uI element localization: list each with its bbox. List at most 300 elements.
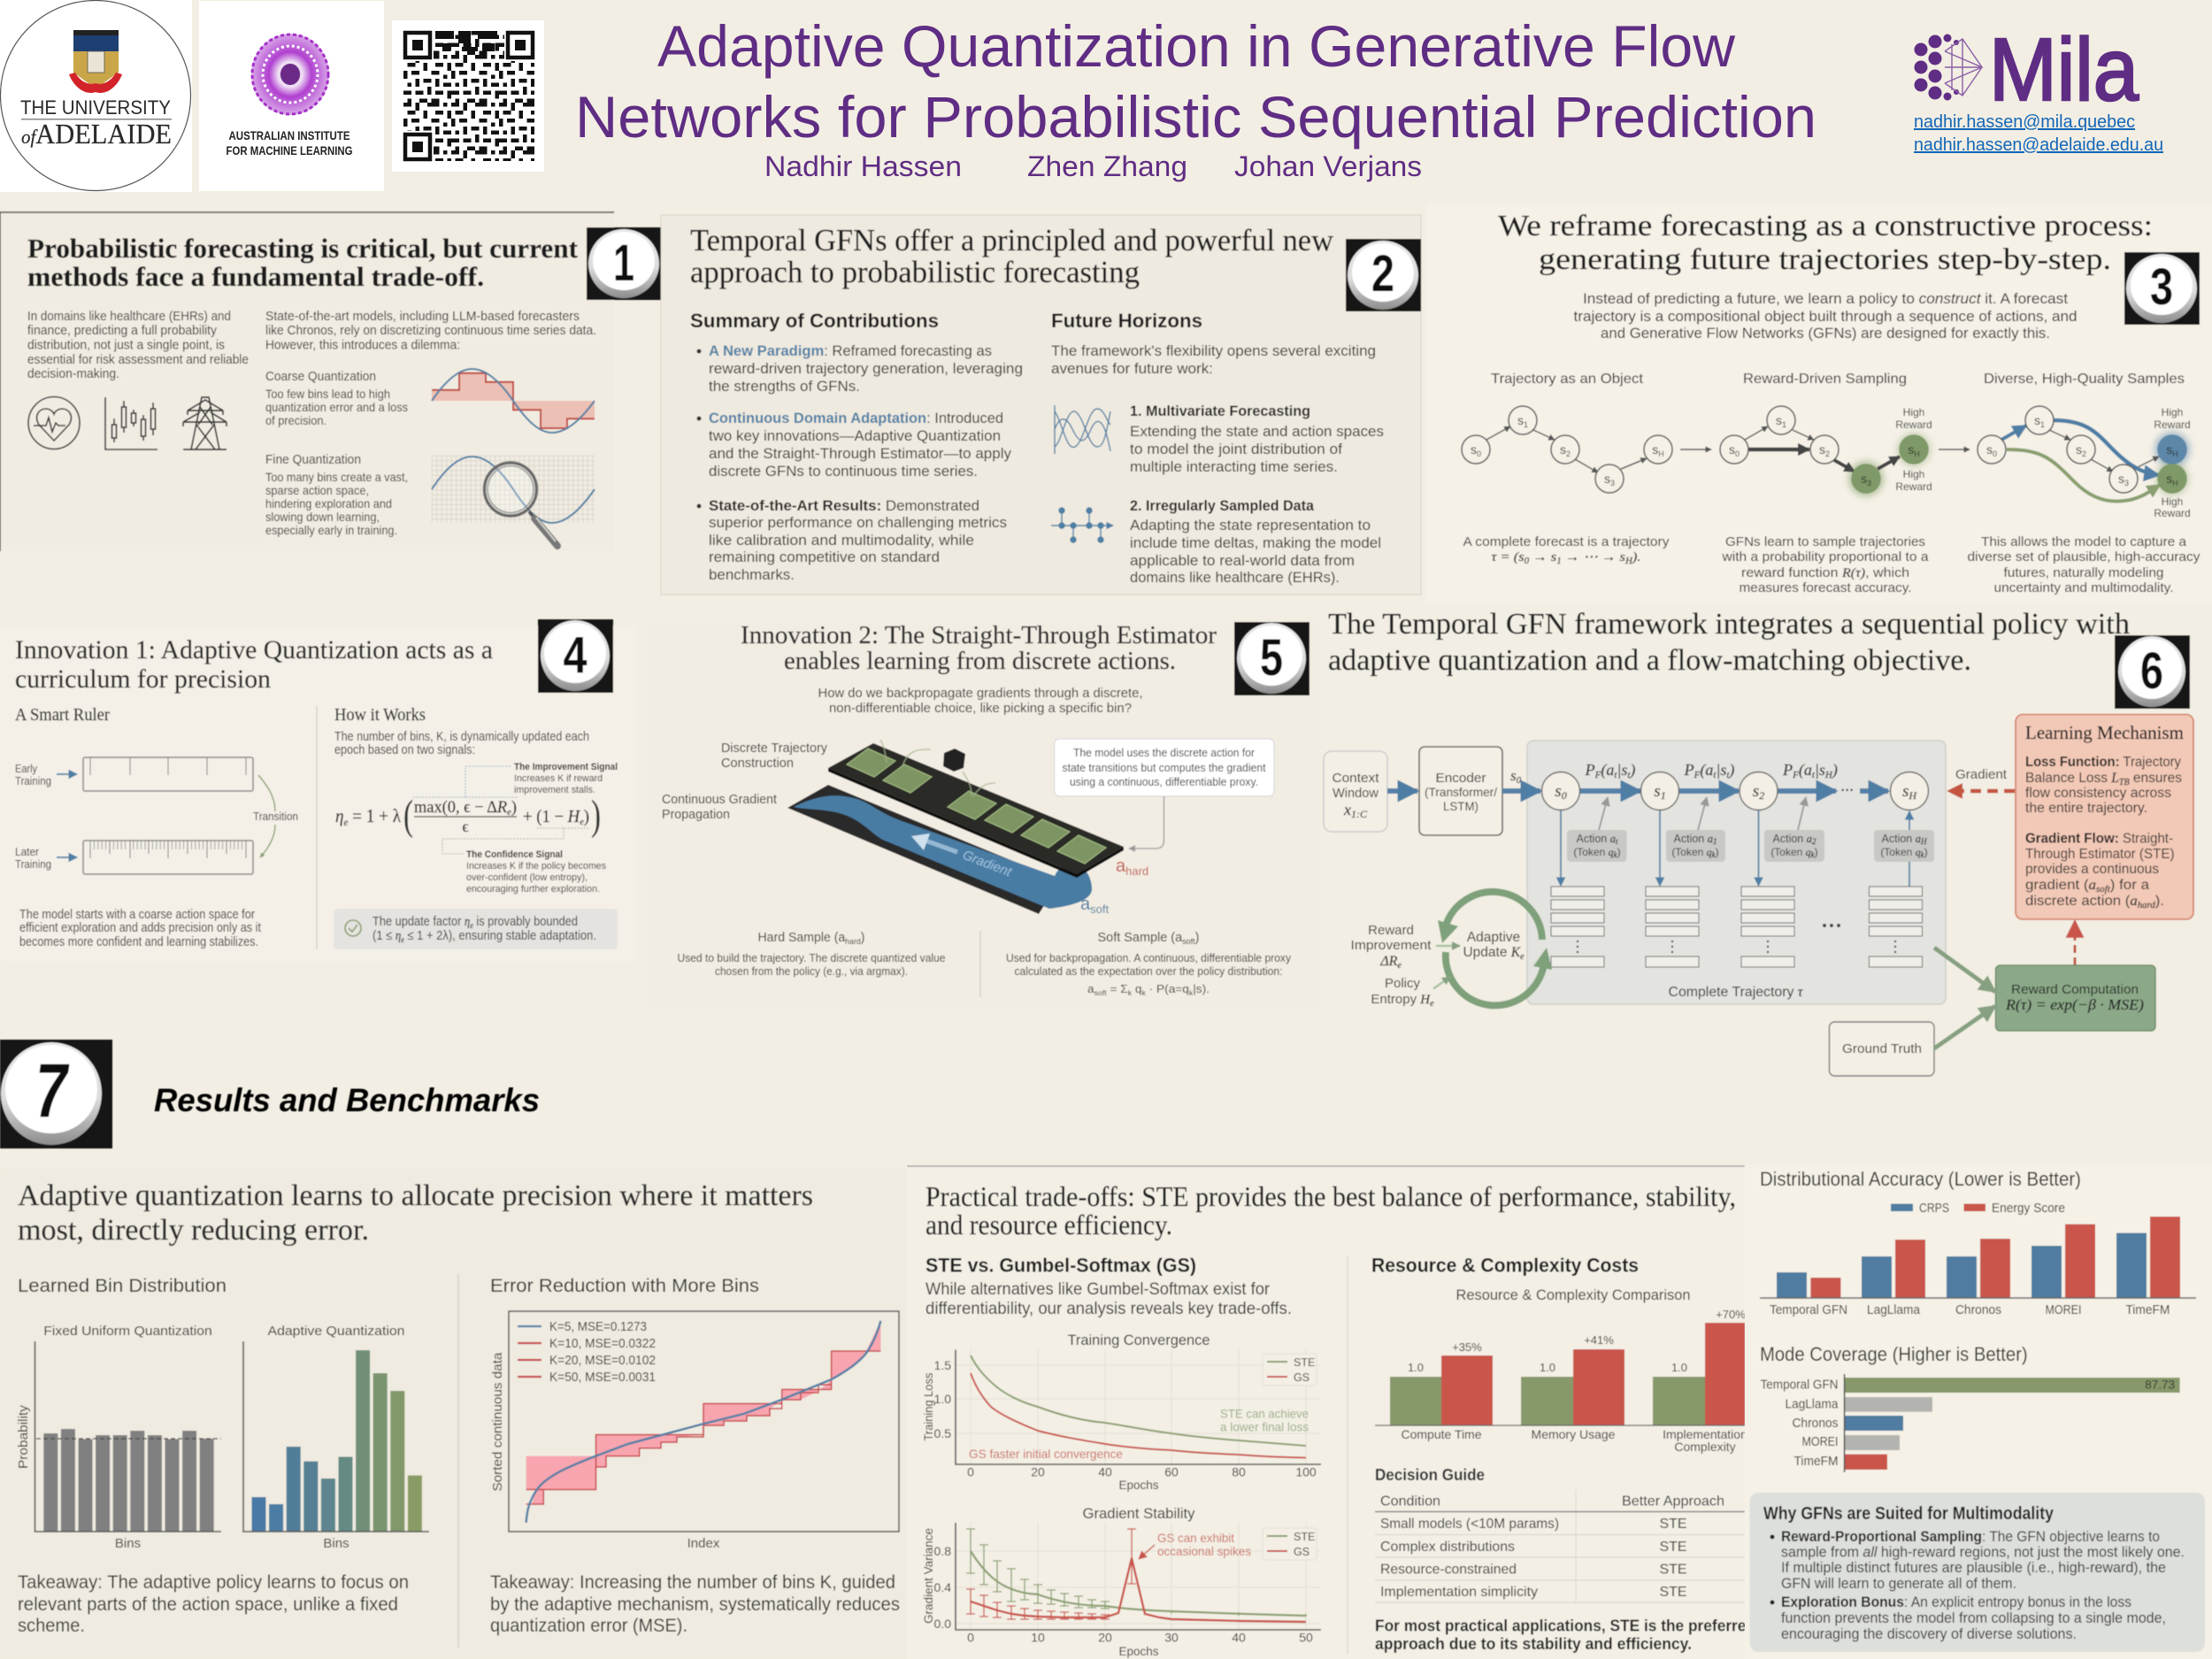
diagram: diverse high-quality samples: This allows the model to capture a	[1981, 534, 2187, 549]
text: STE vs Gumbel-Softmax: While alternatives like Gumbel-Softmax exist for	[926, 1279, 1270, 1299]
how it works: formula: )	[511, 798, 517, 817]
loop inputs: Entropy H	[1371, 992, 1430, 1007]
chart: resource and complexity comparison: Resource & Complexity Comparison	[1456, 1286, 1690, 1303]
box: context window	[1324, 751, 1387, 832]
action boxes: Action a	[1882, 833, 1921, 845]
chart: training convergence: Epochs	[1118, 1479, 1159, 1492]
chart: training convergence: 20	[1031, 1465, 1045, 1479]
chart: training convergence: a lower final loss	[1220, 1419, 1309, 1433]
chart: distributional accuracy: LagLlama	[1867, 1303, 1921, 1317]
diagram: diverse high-quality samples	[1968, 372, 2200, 595]
adaptive update loop: Adaptive	[1467, 930, 1520, 945]
soft sample text: k	[1128, 989, 1133, 997]
action boxes: k	[1712, 850, 1717, 859]
chart: mode coverage: TimeFM	[1794, 1455, 1839, 1469]
chart: adaptive quantization: Bins	[323, 1536, 349, 1551]
policy labels: |s	[1815, 761, 1825, 779]
summary of contributions: like calibration and multimodality, while	[709, 532, 974, 549]
heading: most, directly reducing error.	[18, 1214, 369, 1247]
chart: mode coverage: Temporal GFN	[1761, 1379, 1839, 1393]
diagram: trajectory as an object: s	[1517, 413, 1524, 427]
box: encoder: (Transformer/	[1425, 785, 1497, 799]
diagram: trajectory as an object: s	[1604, 472, 1610, 486]
how it works: formula: The Confidence Signal	[466, 849, 563, 860]
heading 6	[1328, 608, 2130, 677]
state labels: 2	[1759, 789, 1764, 802]
loop inputs: Reward	[1368, 923, 1414, 938]
action boxes: t	[1616, 837, 1618, 846]
diagram: reward-driven sampling: reward function R(τ), which	[1741, 565, 1909, 580]
diagram: trajectory as an object: → s	[1529, 550, 1556, 565]
how it works: formula: )	[584, 807, 589, 826]
diagram: diverse high-quality samples: H	[2172, 449, 2178, 458]
state labels: s	[1753, 782, 1759, 801]
text: STE vs Gumbel-Softmax	[926, 1255, 1292, 1318]
diagram: trajectory as an object: Trajectory as an Object	[1491, 372, 1644, 387]
diagram: trajectory as an object: 3	[1610, 479, 1615, 488]
soft sample text: Soft Sample (a	[1097, 931, 1182, 945]
intro text	[27, 310, 249, 381]
forward policy arrows	[1580, 788, 1888, 794]
loop inputs: Policy	[1385, 976, 1421, 991]
summary of contributions	[690, 310, 1023, 583]
heading: and resource efficiency.	[926, 1209, 1172, 1240]
diagram: diverse high-quality samples: High	[2162, 495, 2183, 508]
QR code	[392, 20, 544, 172]
chart: mode coverage	[1760, 1343, 2180, 1472]
panel 2: contributions and future work	[661, 215, 1421, 595]
chart: training convergence: GS faster initial convergence	[969, 1447, 1123, 1461]
adaptive update loop: Update K	[1463, 945, 1520, 960]
heading 6: adaptive quantization and a flow-matching objective.	[1328, 644, 1971, 677]
3D illustration: straight-through estimator: a	[1116, 856, 1125, 876]
chart: gradient stability: occasional spikes	[1157, 1544, 1251, 1558]
gradient label and arrow	[1948, 767, 2015, 791]
diagram: trajectory as an object: ).	[1632, 550, 1640, 565]
chart: distributional accuracy: Temporal GFN	[1770, 1303, 1847, 1317]
how it works: formula: encouraging further exploration.	[466, 884, 600, 895]
hard sample text: Used to build the trajectory. The discrete quantized value	[678, 952, 946, 964]
smart ruler diagram: Later	[15, 845, 40, 858]
diagram: diverse high-quality samples: s	[2034, 413, 2040, 427]
heading: Practical trade-offs: STE provides the best balance of performance, stability,	[926, 1180, 1736, 1212]
arrow: reward to learning mechanism	[2074, 921, 2076, 965]
diagram: diverse high-quality samples: s	[2166, 472, 2172, 486]
heading 3: generating future trajectories step-by-step.	[1539, 243, 2111, 276]
box: reward computation: R(τ) = exp(−β · MSE)	[2005, 996, 2144, 1013]
chart: gradient stability: GS can exhibit	[1157, 1531, 1234, 1545]
callout: why GFNs suit multimodality	[1750, 1493, 2205, 1652]
action boxes: k	[1921, 850, 1925, 859]
diagram: diverse high-quality samples: s	[1986, 442, 1993, 457]
chart: resource and complexity comparison	[1375, 1286, 1756, 1454]
future horizons: include time deltas, making the model	[1130, 534, 1381, 551]
chart: gradient stability	[921, 1505, 1321, 1658]
how it works: formula: The Improvement Signal	[514, 762, 618, 772]
legend: K=20, MSE=0.0102	[549, 1353, 656, 1368]
number badge 3: 3	[2150, 258, 2173, 316]
chart: resource and complexity comparison: +41%	[1584, 1333, 1614, 1347]
decision guide table: STE	[1659, 1540, 1687, 1555]
diagram: reward-driven sampling: with a probability proportional to a	[1721, 549, 1929, 565]
callout: why GFNs suit multimodality: If multiple distinct futures are plausible (i.e., high-reward), the	[1781, 1559, 2166, 1576]
dilemma text: However, this introduces a dilemma:	[265, 338, 460, 352]
decision guide table: STE	[1659, 1585, 1687, 1600]
legend: GS	[1294, 1371, 1310, 1384]
policy labels: |s	[1617, 761, 1627, 779]
3D illustration: straight-through estimator: a	[1080, 895, 1090, 914]
panel: learning mechanism: provides a continuous	[2025, 862, 2159, 877]
diagram: reward-driven sampling: s	[1819, 442, 1825, 457]
summary of contributions: discrete GFNs to continuous time series.	[709, 463, 978, 480]
action boxes: k	[1811, 850, 1816, 859]
3D illustration: straight-through estimator: hard	[1125, 864, 1148, 878]
panel: learning mechanism: Through Estimator (STE)	[2025, 847, 2175, 862]
action boxes	[1567, 830, 1934, 862]
policy labels: P	[1783, 761, 1793, 779]
diagram: diverse high-quality samples: Diverse, High-Quality Samples	[1984, 372, 2185, 387]
arrow: context to encoder	[1387, 788, 1417, 794]
takeaway: adaptive policy	[18, 1572, 409, 1636]
diagram: reward-driven sampling: s	[1908, 442, 1914, 457]
diagram: reward-driven sampling: H	[1914, 449, 1920, 458]
how it works: formula: epoch based on two signals:	[334, 743, 475, 757]
number badge 1: 1	[613, 234, 634, 292]
smart ruler diagram: becomes more confident and learning stabilizes.	[19, 935, 258, 949]
question text: non-differentiable choice, like picking a specific bin?	[829, 702, 1132, 716]
state labels: s	[1902, 782, 1909, 801]
how it works: formula: improvement stalls.	[514, 785, 595, 795]
authors: Nadhir Hassen	[764, 150, 962, 182]
soft sample text: soft	[1094, 989, 1108, 997]
heading 3: We reframe forecasting as a constructive process:	[1498, 210, 2153, 242]
takeaway: more bins: by the adaptive mechanism, systematically reduces	[490, 1594, 900, 1615]
how it works: formula: max(0, ϵ − ΔR	[414, 798, 508, 817]
future horizons: Adapting the state representation to	[1130, 517, 1371, 534]
diagram: trajectory as an object: → ⋯ → s	[1562, 550, 1625, 565]
intro text: distribution, not just a single point, is	[27, 338, 225, 352]
chart: mode coverage: 87.73	[2145, 1379, 2175, 1391]
chart: fixed uniform quantization	[17, 1324, 221, 1551]
soft sample text: )	[1195, 931, 1200, 945]
decision guide table: Decision Guide	[1375, 1466, 1485, 1484]
state labels	[1555, 782, 1917, 802]
callout: bounded update	[334, 909, 618, 949]
loop inputs: Improvement	[1350, 938, 1432, 953]
chart: gradient stability: 0.8	[934, 1544, 951, 1558]
chart: resource and complexity comparison: +35%	[1452, 1340, 1482, 1354]
coarse quantization text: of precision.	[265, 413, 326, 427]
policy labels: |s	[1716, 761, 1726, 779]
diagram: trajectory as an object: s	[1652, 442, 1658, 457]
3D illustration: straight-through estimator: soft	[1090, 902, 1109, 916]
title	[575, 13, 1816, 150]
diagram: trajectory as an object: 2	[1566, 449, 1571, 458]
panel: complete trajectory: 0	[1517, 775, 1522, 786]
soft sample text: k	[1189, 989, 1194, 997]
3D illustration: straight-through estimator	[787, 740, 1148, 916]
labels: discrete and continuous tracks: Construction	[721, 757, 794, 771]
hard sample text: hard	[845, 937, 861, 946]
heading	[18, 1179, 813, 1247]
legend	[1263, 1528, 1317, 1560]
callout: why GFNs suit multimodality: function prevents the model from collapsing to a single mode,	[1781, 1609, 2166, 1626]
how it works: formula: The number of bins, K, is dynamically updated each	[334, 730, 589, 744]
policy labels: P	[1586, 761, 1595, 779]
labels: discrete and continuous tracks: Propagation	[662, 808, 730, 822]
title: Adaptive Quantization in Generative Flow	[657, 13, 1735, 79]
diagram: reward-driven sampling: High	[1903, 468, 1924, 480]
loop inputs: e	[1430, 999, 1434, 1009]
decision guide table: Better Approach	[1622, 1494, 1724, 1509]
chart: training convergence: 0.5	[934, 1426, 951, 1440]
number badge 7	[0, 1040, 112, 1148]
box: encoder	[1419, 747, 1502, 835]
callout: bounded update: The update factor η	[373, 915, 473, 929]
diagram: trajectory as an object: τ = (s	[1492, 550, 1521, 565]
decision guide table: STE	[1659, 1563, 1687, 1577]
policy labels: )	[1832, 761, 1838, 780]
box: encoder: Encoder	[1435, 771, 1486, 786]
labels: discrete and continuous tracks: Discrete Trajectory	[721, 741, 828, 756]
diagram: diverse high-quality samples: H	[2172, 479, 2178, 488]
policy labels: P	[1685, 761, 1694, 779]
intro text: essential for risk assessment and reliable	[27, 353, 249, 367]
panel: complete trajectory	[1502, 741, 1946, 1004]
icon: candlestick chart	[105, 397, 157, 449]
adaptive update loop	[1438, 892, 1552, 1005]
state labels: s	[1654, 782, 1661, 801]
action boxes: )	[1617, 846, 1621, 858]
chart: error reduction with more bins	[490, 1311, 899, 1551]
box: ground truth: Ground Truth	[1842, 1041, 1922, 1056]
heading 2	[690, 223, 1334, 289]
arrow: step one to two	[1680, 449, 1711, 450]
policy labels	[1585, 761, 1838, 780]
heading 4	[15, 635, 493, 694]
number badge 6	[2115, 635, 2190, 709]
diagram: trajectory as an object: H	[1624, 557, 1633, 566]
policy labels: H	[1824, 770, 1833, 780]
chart: gradient stability: 50	[1299, 1630, 1313, 1644]
intro text: finance, predicting a full probability	[27, 324, 218, 338]
chart: training convergence	[921, 1332, 1321, 1492]
chart: distributional accuracy: Distributional Accuracy (Lower is Better)	[1760, 1168, 2081, 1190]
token selection arrows	[1561, 810, 1909, 887]
diagram: trajectory as an object	[1462, 372, 1672, 566]
labels: discrete and continuous tracks	[662, 741, 828, 822]
diagram: reward-driven sampling: s	[1729, 442, 1735, 457]
decision guide table	[1375, 1466, 1745, 1602]
logo: University of Adelaide: THE UNIVERSITY	[20, 96, 171, 119]
diagram: reward-driven sampling: 0	[1735, 449, 1740, 458]
action boxes: 2	[1812, 837, 1816, 846]
diagram: reward-driven sampling: GFNs learn to sample trajectories	[1725, 534, 1925, 549]
smart ruler diagram: Early	[15, 762, 37, 775]
action arrows	[1599, 797, 1806, 830]
decision guide table: Small models (<10M params)	[1380, 1517, 1559, 1532]
diagram: trajectory as an object: 0	[1477, 449, 1481, 458]
chart: resource and complexity comparison: 1.0	[1671, 1361, 1687, 1374]
diagram: diverse high-quality samples: futures, naturally modeling	[2003, 565, 2164, 580]
token stacks	[1551, 887, 1922, 967]
section 7 heading	[0, 1040, 540, 1148]
heading 1: methods face a fundamental trade-off.	[27, 261, 484, 292]
loop inputs	[1350, 923, 1460, 1009]
diagram: diverse high-quality samples: s	[2166, 442, 2172, 457]
legend	[1263, 1354, 1317, 1386]
decision guide table: Implementation simplicity	[1380, 1585, 1538, 1600]
title: Networks for Probabilistic Sequential Prediction	[575, 84, 1816, 150]
adaptive update loop: e	[1520, 952, 1525, 962]
chart: training convergence: 40	[1098, 1465, 1112, 1479]
action boxes: Action a	[1577, 833, 1616, 845]
legend: K=10, MSE=0.0322	[549, 1336, 656, 1351]
heading 2: approach to probabilistic forecasting	[690, 255, 1140, 289]
intro paragraph: trajectory is a compositional object built through a sequence of actions, and	[1573, 308, 2078, 325]
legend: K=5, MSE=0.1273	[549, 1319, 647, 1334]
contact emails	[1914, 112, 2163, 155]
state labels: ···	[1840, 783, 1855, 798]
fine quantization text: Fine Quantization	[265, 453, 361, 467]
heading 4: Innovation 1: Adaptive Quantization acts as a	[15, 635, 493, 664]
arrow: callout leader	[1129, 796, 1164, 849]
chart: fixed uniform quantization: Bins	[115, 1536, 141, 1551]
action boxes: Action a	[1773, 833, 1812, 845]
panel: learning mechanism: Balance Loss L	[2025, 771, 2119, 786]
chart: distributional accuracy: Energy Score	[1992, 1202, 2065, 1216]
diagram: trajectory as an object: s	[1471, 442, 1477, 457]
panel 5: straight-through estimator	[650, 619, 1318, 1009]
diagram: trajectory as an object: 1	[1524, 420, 1528, 429]
number badge 4	[538, 619, 613, 693]
diagram: diverse high-quality samples: s	[2076, 442, 2082, 457]
future horizons	[1051, 310, 1384, 586]
decision guide table: STE	[1659, 1517, 1687, 1532]
chart: resource and complexity comparison: Memory Usage	[1532, 1427, 1616, 1441]
hard sample text: )	[861, 931, 864, 945]
number badge 1	[587, 227, 662, 300]
how it works: formula: Increases K if reward	[514, 773, 603, 784]
heading: Adaptive quantization learns to allocate precision where it matters	[18, 1179, 813, 1212]
action boxes: (Token q	[1671, 846, 1712, 858]
authors: Johan Verjans	[1234, 150, 1422, 182]
number badge 6: 6	[2140, 642, 2163, 700]
icon: multivariate waves	[1055, 405, 1110, 454]
policy labels: (a	[1601, 761, 1614, 780]
chart: training convergence: Training Loss	[921, 1373, 935, 1440]
future horizons: The framework's flexibility opens several exciting	[1051, 342, 1376, 359]
diagram: reward-driven sampling	[1720, 372, 1932, 595]
panel: learning mechanism: Loss Function: Trajectory	[2025, 755, 2181, 770]
diagram: diverse high-quality samples: 3	[2124, 479, 2129, 488]
contact emails: nadhir.hassen@adelaide.edu.au	[1914, 135, 2163, 155]
summary of contributions: Continuous Domain Adaptation: Introduced	[709, 410, 1003, 426]
heading 1	[27, 233, 579, 292]
decision guide table: Resource-constrained	[1380, 1563, 1517, 1577]
action boxes: (Token q	[1573, 846, 1614, 858]
coarse quantization text: Too few bins lead to high	[265, 387, 390, 401]
chart: adaptive quantization: Adaptive Quantization	[267, 1324, 405, 1339]
number badge 7: 7	[35, 1048, 70, 1133]
summary of contributions: State-of-the-Art Results: Demonstrated	[709, 497, 979, 514]
callout: bounded update: ≤ 1 + 2λ), ensuring stable adaptation.	[404, 929, 596, 943]
diagram: diverse high-quality samples: Reward	[2154, 507, 2191, 519]
callout: bounded update: is provably bounded	[473, 915, 578, 929]
diagram: diverse high-quality samples: High	[2162, 406, 2183, 419]
arrow: step two to three	[1939, 449, 1970, 450]
action boxes: )	[1815, 846, 1818, 858]
policy labels: t	[1614, 770, 1617, 780]
intro text: decision-making.	[27, 367, 119, 381]
legend	[518, 1319, 656, 1385]
policy labels: (a	[1700, 761, 1713, 780]
heading: resource costs: Resource & Complexity Costs	[1371, 1255, 1639, 1276]
panel: complete trajectory: Complete Trajectory τ	[1669, 985, 1804, 1000]
policy labels: (a	[1799, 761, 1812, 780]
soft sample text	[1006, 931, 1292, 997]
policy labels: F	[1594, 770, 1601, 780]
fine quantization text: Too many bins create a vast,	[265, 470, 408, 484]
diagram: reward-driven sampling: measures forecast accuracy.	[1740, 580, 1911, 595]
box: reward computation	[1996, 965, 2155, 1031]
policy labels: )	[1629, 761, 1635, 780]
legend: STE	[1294, 1531, 1315, 1543]
future horizons: to model the joint distribution of	[1130, 441, 1342, 457]
chart: distributional accuracy	[1760, 1168, 2196, 1317]
state labels: s	[1555, 782, 1562, 801]
future horizons: Extending the state and action spaces	[1130, 423, 1384, 440]
number badge 3	[2124, 252, 2200, 325]
coarse quantization text	[265, 370, 408, 427]
chart: gradient stability: 40	[1232, 1630, 1246, 1644]
summary of contributions: two key innovations—Adaptive Quantization	[709, 427, 1001, 444]
chart: mode coverage: LagLlama	[1786, 1398, 1839, 1412]
diagram: trajectory as an object: s	[1560, 442, 1566, 457]
panel: learning mechanism: flow consistency across	[2025, 786, 2171, 801]
vertical ellipses	[1577, 924, 1896, 953]
intro text: In domains like healthcare (EHRs) and	[27, 310, 231, 324]
callout: why GFNs suit multimodality: sample from all high-reward regions, not just the most likely one.	[1781, 1543, 2185, 1561]
labels: discrete and continuous tracks: Continuous Gradient	[662, 793, 777, 807]
logo: Australian Institute for Machine Learning: FOR MACHINE LEARNING	[227, 143, 353, 157]
future horizons: Future Horizons	[1051, 310, 1202, 332]
policy labels: F	[1792, 770, 1799, 780]
state nodes	[1541, 772, 1929, 810]
callout: bounded update: e	[401, 935, 404, 944]
callout: gradient proxy	[1055, 739, 1274, 796]
soft sample text: |s).	[1193, 983, 1210, 995]
chart: gradient stability: 10	[1031, 1630, 1045, 1644]
panel: learning mechanism: ) for a	[2110, 878, 2149, 893]
logo: Australian Institute for Machine Learning: AUSTRALIAN INSTITUTE	[228, 128, 350, 142]
box: ground truth	[1830, 1022, 1934, 1076]
takeaway: adaptive policy: scheme.	[18, 1616, 85, 1636]
soft sample text: calculated as the expectation over the policy distribution:	[1014, 965, 1283, 978]
chart: gradient stability: Gradient Stability	[1083, 1505, 1195, 1522]
panel: learning mechanism: hard	[2138, 901, 2156, 910]
callout: why GFNs suit multimodality: GFN will learn to generate all of them.	[1781, 1575, 2016, 1592]
diagram: reward-driven sampling: 2	[1825, 449, 1830, 458]
soft sample text: k	[1142, 989, 1147, 997]
diagram: reward-driven sampling: 1	[1782, 420, 1786, 429]
loop inputs: e	[1397, 961, 1402, 971]
panel: learning mechanism: Learning Mechanism	[2025, 722, 2184, 743]
diagram: diverse high-quality samples: 2	[2082, 449, 2086, 458]
future horizons: domains like healthcare (EHRs).	[1130, 569, 1340, 586]
how it works: formula: )	[591, 792, 601, 839]
panel 3: constructive process	[1426, 204, 2212, 603]
